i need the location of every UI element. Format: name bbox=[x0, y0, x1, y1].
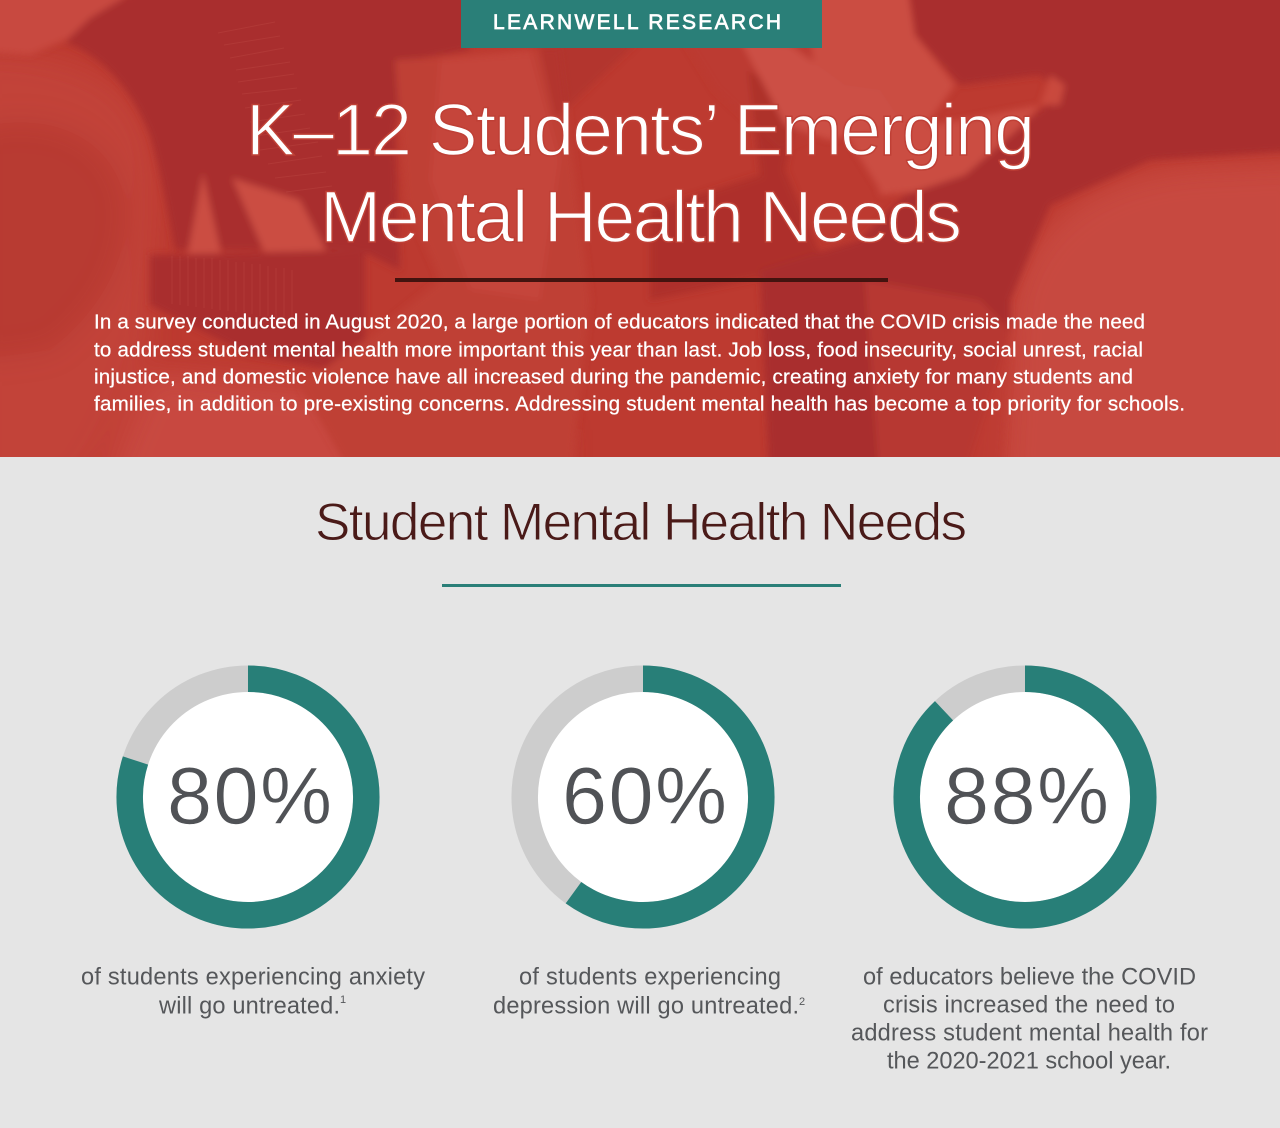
caption: 80%: of students experiencing anxiety bbox=[81, 964, 425, 990]
section heading: Student Mental Health Needs bbox=[315, 493, 967, 552]
caption: 88%: the 2020-2021 school year. bbox=[887, 1048, 1171, 1074]
banner: LearnWell Research: LEARNWELL RESEARCH bbox=[493, 11, 781, 34]
caption: 60%: depression will go untreated. bbox=[493, 994, 799, 1020]
donut chart: 60%: 60% bbox=[562, 752, 727, 842]
title divider bbox=[395, 278, 888, 282]
title: Mental Health Needs bbox=[320, 175, 962, 258]
caption: 80%: will go untreated. bbox=[158, 994, 340, 1020]
donut chart: 80%: 80% bbox=[167, 752, 332, 842]
intro paragraph: to address student mental health more important this year than last. Job loss, food insecurity, social unrest, racial bbox=[94, 338, 1143, 362]
donut chart: 88% bbox=[907, 679, 1143, 915]
intro paragraph: injustice, and domestic violence have all increased during the pandemic, creating anxiety for many students and bbox=[94, 366, 1133, 388]
donut chart: 88%: 88% bbox=[944, 752, 1109, 842]
intro paragraph bbox=[94, 310, 1185, 416]
caption: 60%: 2 bbox=[799, 996, 805, 1008]
banner: LearnWell Research bbox=[461, 0, 822, 48]
caption: 88%: of educators believe the COVID bbox=[863, 964, 1196, 990]
caption: 80%: 1 bbox=[340, 994, 346, 1006]
intro paragraph: families, in addition to pre-existing concerns. Addressing student mental health has become a top priority for schools. bbox=[94, 392, 1185, 416]
caption: 60%: of students experiencing bbox=[519, 964, 781, 990]
donut chart: 80% bbox=[130, 679, 366, 915]
panel: student mental health needs background bbox=[0, 457, 1280, 1128]
donut chart: 60% bbox=[525, 679, 761, 915]
caption: 60% bbox=[493, 964, 805, 1020]
caption: 88%: crisis increased the need to bbox=[883, 992, 1175, 1018]
section divider bbox=[442, 584, 841, 587]
intro paragraph: In a survey conducted in August 2020, a large portion of educators indicated that the COVID crisis made the need bbox=[94, 310, 1145, 334]
panel: header photo background bbox=[0, 0, 1280, 490]
caption: 88%: address student mental health for bbox=[851, 1020, 1208, 1046]
caption: 88% bbox=[851, 964, 1208, 1074]
caption: 80% bbox=[81, 964, 425, 1020]
title bbox=[246, 88, 1035, 258]
title: K–12 Students’ Emerging bbox=[246, 88, 1035, 171]
